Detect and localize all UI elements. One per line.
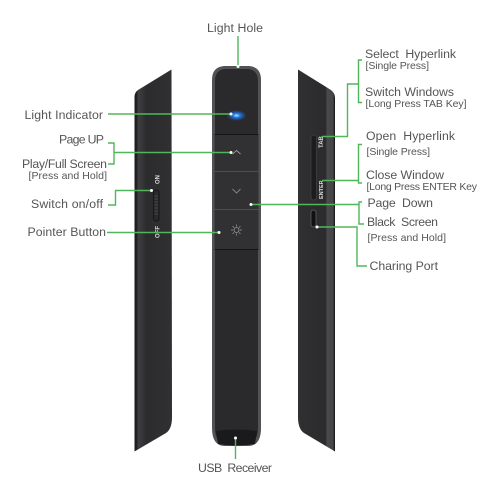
- callout: USB receiver: USB Receiver: [198, 461, 272, 475]
- callout: select hyperlink and switch windows: [Single Press]: [366, 60, 429, 72]
- callout: pointer button: [28, 225, 220, 239]
- USB receiver end: [216, 430, 257, 446]
- right side view of presenter: [298, 70, 335, 452]
- callout: page down and black screen: [Press and Hold]: [368, 232, 446, 244]
- callout: light hole: Light Hole: [207, 21, 263, 35]
- power switch: [154, 175, 162, 238]
- icon: page down chevron: [232, 189, 240, 193]
- callout: page down and black screen: [250, 196, 446, 244]
- callout: open hyperlink and close window: Open Hyperlink: [366, 129, 456, 143]
- callout: light indicator: Light Indicator: [24, 108, 103, 122]
- callout: page down and black screen: Black Screen: [367, 215, 438, 229]
- TAB label: TAB: [319, 135, 325, 148]
- callout: USB receiver: [198, 436, 272, 475]
- callout: page up and play: [Press and Hold]: [28, 170, 107, 182]
- callout: open hyperlink and close window: [322, 129, 478, 193]
- power switch: OFF: [156, 226, 162, 238]
- callout: open hyperlink and close window: Close Window: [366, 168, 444, 182]
- icon: blue light indicator: [226, 110, 246, 121]
- callout: light hole: [207, 21, 263, 68]
- icon: pointer button: [231, 224, 242, 236]
- side key: [311, 135, 316, 200]
- callout: switch on/off: [31, 189, 153, 211]
- charging port: [311, 210, 316, 227]
- icon: page up chevron: [232, 150, 240, 154]
- callout: switch on/off: Switch on/off: [31, 197, 104, 211]
- callout: light indicator: [24, 108, 232, 122]
- callout: select hyperlink and switch windows: Select Hyperlink: [365, 47, 457, 61]
- callout: charging port: Charing Port: [370, 259, 439, 273]
- callout: open hyperlink and close window: [Single Press]: [366, 146, 430, 158]
- ENTER label: ENTER: [319, 180, 325, 199]
- left side view of presenter: [134, 70, 172, 452]
- callout: page up and play: Play/Full Screen: [22, 157, 107, 171]
- callout: page up and play: Page UP: [59, 132, 104, 146]
- front view of presenter: [212, 66, 261, 446]
- button panel: [214, 134, 258, 250]
- callout: charging port: [316, 226, 439, 273]
- callout: select hyperlink and switch windows: Switch Windows: [365, 85, 454, 99]
- callout: open hyperlink and close window: [Long Press ENTER Key: [366, 181, 478, 193]
- callout: page up and play: [22, 132, 232, 182]
- callout: select hyperlink and switch windows: [Long Press TAB Key]: [366, 98, 467, 110]
- callout: pointer button: Pointer Button: [28, 225, 106, 239]
- callout: select hyperlink and switch windows: [322, 47, 467, 136]
- power switch: ON: [156, 175, 162, 184]
- callout: page down and black screen: Page Down: [368, 196, 433, 210]
